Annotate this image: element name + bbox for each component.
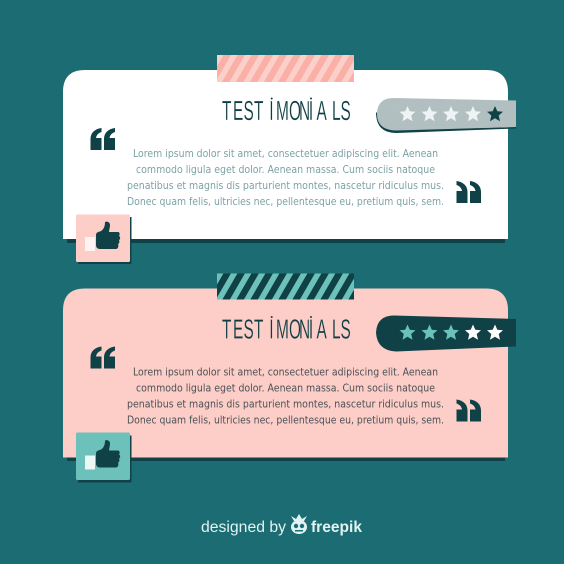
footer: designed by freepik [201, 514, 362, 536]
text block: body copy: penatibus et magnis dis parturient montes, nascetur ridiculus mus. [127, 400, 444, 410]
icon: opening quote [90, 346, 115, 368]
panel: white testimonial card [63, 55, 516, 264]
text block: body copy: penatibus et magnis dis parturient montes, nascetur ridiculus mus. [127, 181, 444, 192]
footer: designed by freepik: freepik [311, 519, 362, 536]
text block: body copy: Donec quam felis, ultricies nec, pellentesque eu, pretium quis, sem. [127, 416, 444, 426]
text block: body copy: Donec quam felis, ultricies nec, pellentesque eu, pretium quis, sem. [127, 197, 444, 208]
text block: body copy: commodo ligula eget dolor. Aenean massa. Cum sociis natoque [136, 384, 435, 394]
icon: closing quote [456, 181, 481, 203]
footer: designed by freepik: designed by [201, 519, 286, 536]
text block: body copy: Lorem ipsum dolor sit amet, consectetuer adipiscing elit. Aenean [133, 149, 438, 160]
heading: testimonials: TESTIMONIALS [222, 314, 351, 345]
icon: opening quote [90, 128, 115, 150]
rating pill: five stars [376, 316, 516, 352]
text block: body copy: Lorem ipsum dolor sit amet, consectetuer adipiscing elit. Aenean [133, 368, 438, 378]
icon: thumbs up badge [76, 214, 132, 264]
tape: pink striped [217, 55, 354, 82]
icon: freepik mascot [291, 514, 307, 534]
text block: body copy [127, 368, 444, 426]
panel: pink testimonial card [63, 274, 516, 482]
heading: testimonials: TESTIMONIALS [222, 95, 351, 126]
tape: dark striped [217, 274, 354, 300]
text block: body copy: commodo ligula eget dolor. Aenean massa. Cum sociis natoque [136, 165, 435, 176]
icon: thumbs up badge [76, 432, 132, 482]
rating pill: four of five stars [376, 98, 516, 133]
text block: body copy [127, 149, 444, 208]
icon: closing quote [456, 400, 481, 422]
